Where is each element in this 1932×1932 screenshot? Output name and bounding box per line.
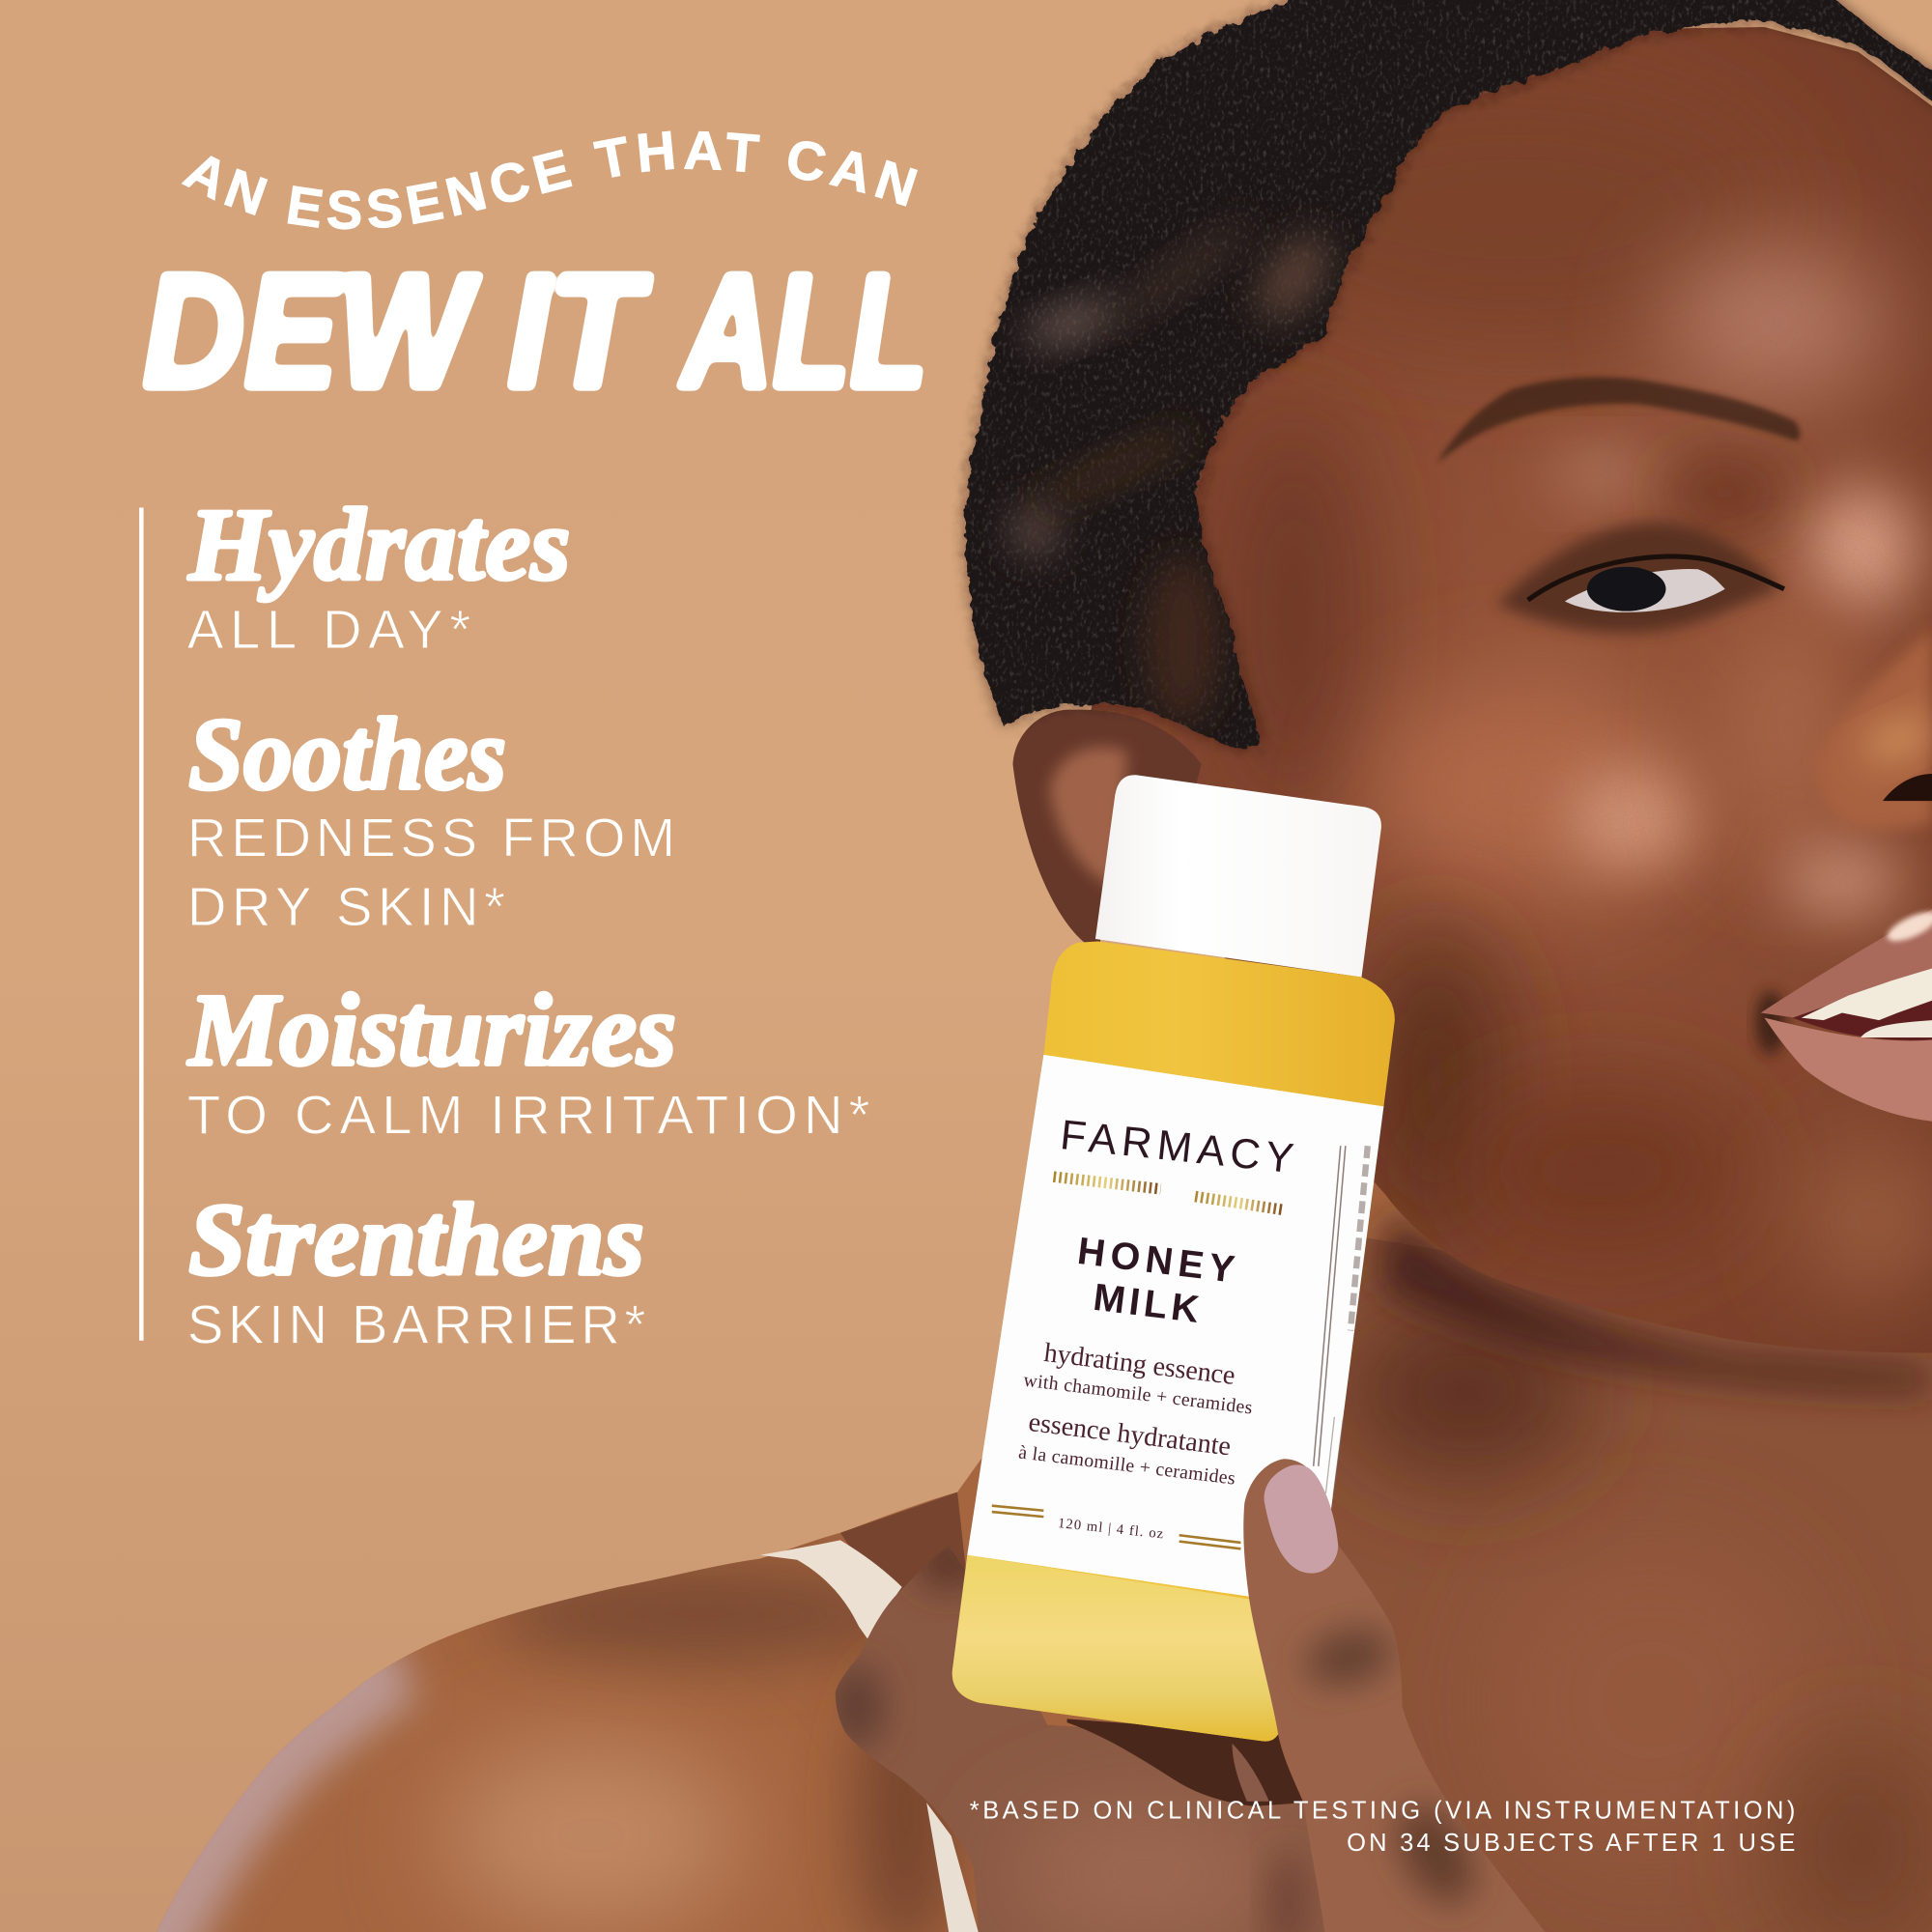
footnote: ON 34 SUBJECTS AFTER 1 USE [1347, 1830, 1795, 1857]
brand name: FARMACY [1058, 1112, 1295, 1182]
strap [760, 1540, 979, 1932]
product name: HONEY [1075, 1230, 1236, 1291]
white label [967, 1055, 1383, 1606]
eye [1497, 523, 1784, 633]
benefit: moisturizes: TO CALM IRRITATION* [187, 1084, 870, 1145]
eyebrow [1436, 377, 1800, 464]
footnote [970, 1798, 1795, 1857]
vertical divider [139, 508, 144, 1341]
footnote: *BASED ON CLINICAL TESTING (VIA INSTRUMENTATION) [970, 1798, 1795, 1825]
arched tagline: AN ESSENCE THAT CAN [182, 131, 918, 230]
descriptor english and french: 120 ml | 4 fl. oz [1057, 1516, 1165, 1542]
main headline: DEW [143, 241, 481, 422]
descriptor english and french: with chamomile + ceramides [1022, 1370, 1254, 1418]
ear [1012, 710, 1202, 952]
side panel small print [1325, 1146, 1368, 1495]
gold tick rules [1054, 1177, 1284, 1210]
lips [1761, 906, 1932, 1122]
descriptor english and french [1017, 1338, 1254, 1542]
product name [1075, 1230, 1236, 1331]
main headline: IT [508, 241, 651, 422]
bottle body [952, 941, 1395, 1742]
benefit: strengthens [187, 1183, 645, 1354]
hair [949, 0, 1932, 764]
benefit: moisturizes: Moisturizes [186, 974, 676, 1088]
benefit: strengthens: SKIN BARRIER* [187, 1293, 645, 1354]
neck [1331, 1238, 1932, 1932]
gold lines [992, 1506, 1240, 1548]
product: honey milk bottle [952, 775, 1395, 1742]
thumb and nail [1243, 1459, 1545, 1932]
descriptor english and french: essence hydratante [1027, 1407, 1233, 1462]
nail [1264, 1464, 1338, 1574]
main headline: ALL [678, 241, 927, 422]
benefit: soothes: REDNESS FROM [187, 807, 675, 867]
descriptor english and french: hydrating essence [1042, 1338, 1236, 1391]
benefit: soothes [187, 697, 675, 937]
face [1084, 0, 1932, 1368]
bottle cap [1095, 775, 1381, 977]
descriptor english and french: à la camomille + ceramides [1017, 1441, 1236, 1490]
bottle lower liquid [952, 1555, 1282, 1742]
benefit: hydrates: ALL DAY* [187, 599, 470, 660]
shoulder and neck [135, 1109, 1932, 1932]
benefit: soothes: DRY SKIN* [187, 876, 505, 937]
product name: MILK [1091, 1276, 1202, 1331]
nose [1816, 629, 1932, 829]
palm hollow [1067, 1719, 1303, 1806]
side panel lines [1314, 1146, 1346, 1466]
main headline [143, 241, 927, 422]
benefit: soothes: Soothes [188, 697, 506, 811]
benefit: strengthens: Strenthens [188, 1183, 644, 1297]
benefit: hydrates [187, 488, 571, 660]
benefit: hydrates: Hydrates [187, 488, 571, 602]
hand behind bottle [829, 1535, 1355, 1932]
benefit: moisturizes [186, 974, 870, 1145]
